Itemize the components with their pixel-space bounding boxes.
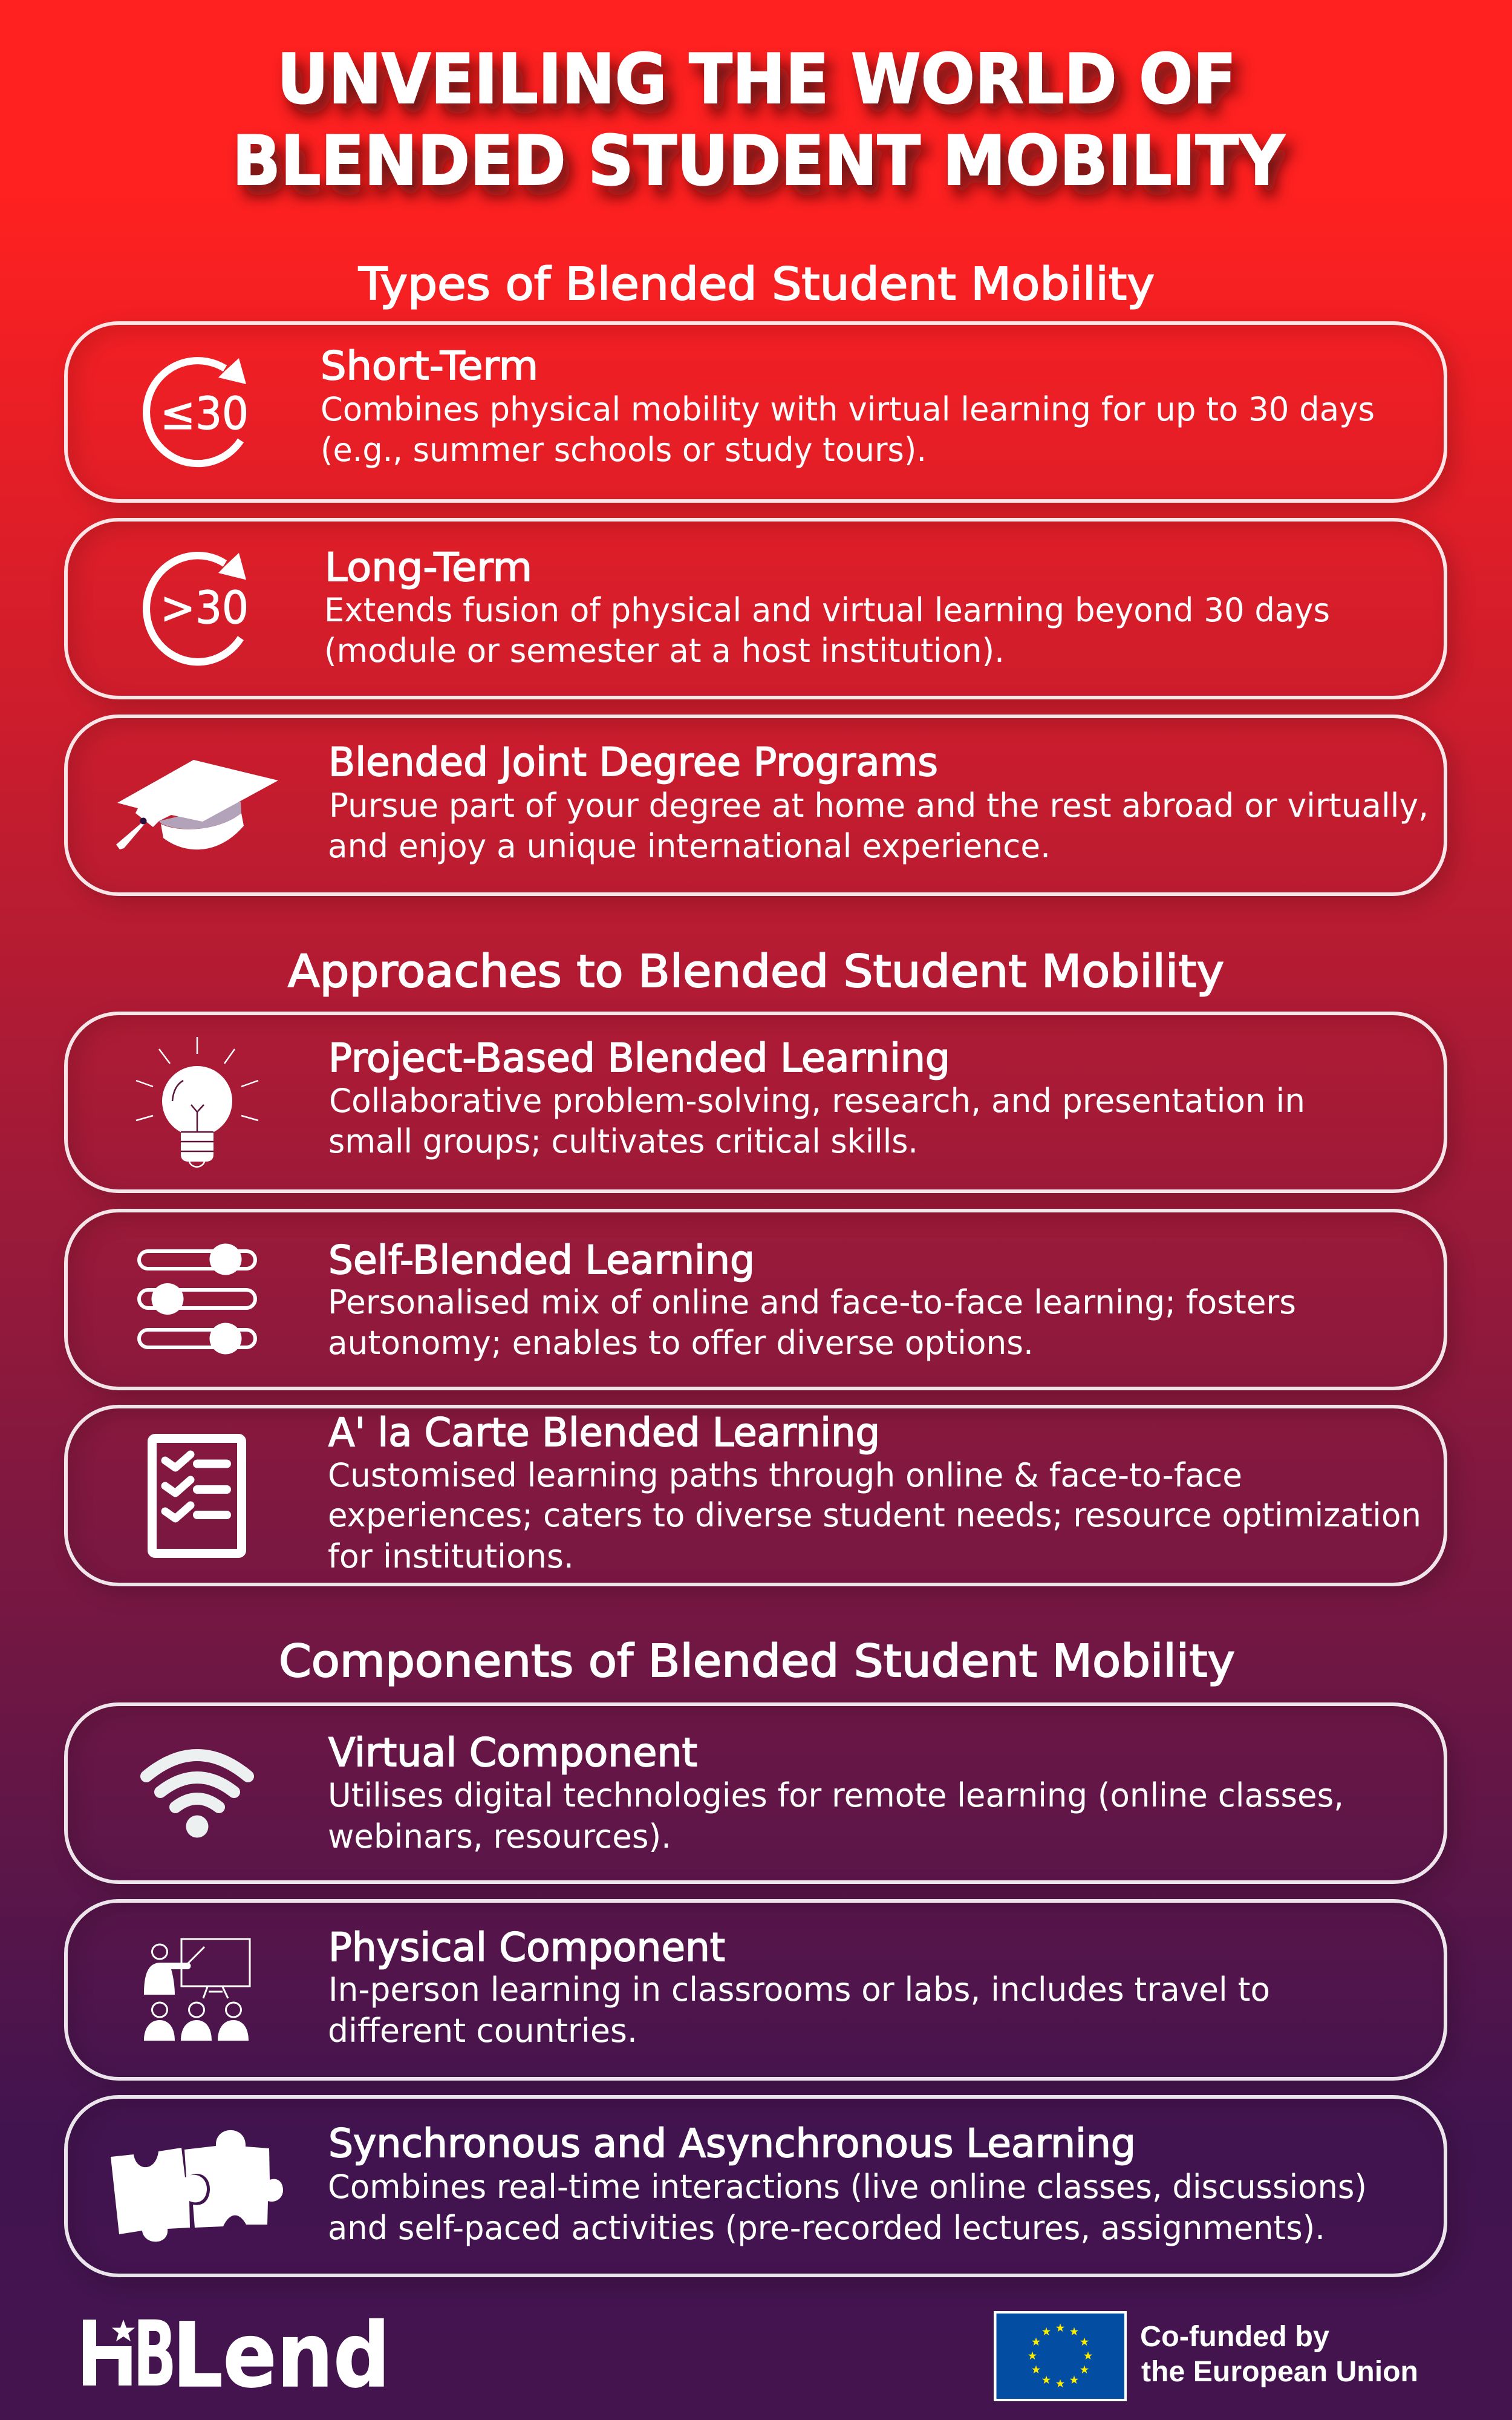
item title: Project-Based Blended Learning	[328, 1036, 950, 1081]
icon: wifi	[146, 1755, 248, 1838]
item description: and enjoy a unique international experience.	[328, 827, 1051, 865]
panel: blended joint degree	[64, 715, 1447, 896]
item description	[321, 390, 1375, 469]
item title: Synchronous and Asynchronous Learning	[328, 2121, 1136, 2167]
item description: for institutions.	[328, 1537, 574, 1575]
panel: project-based	[64, 1012, 1447, 1193]
panel: a la carte	[64, 1405, 1447, 1586]
item description: In-person learning in classrooms or labs, includes travel to	[328, 1970, 1270, 2009]
icon: classroom	[144, 1939, 250, 2041]
item description: Combines physical mobility with virtual learning for up to 30 days	[321, 390, 1375, 428]
item title: Short-Term	[321, 344, 538, 389]
co-funded text: the European Union	[1141, 2356, 1418, 2388]
item description: small groups; cultivates critical skills.	[328, 1122, 918, 1160]
panel: synchronous and asynchronous	[64, 2095, 1447, 2277]
item description: (e.g., summer schools or study tours).	[321, 431, 927, 469]
item description	[328, 1283, 1296, 1362]
item description: Collaborative problem-solving, research, and presentation in	[329, 1082, 1305, 1120]
item description	[328, 1970, 1270, 2050]
item title: Physical Component	[328, 1925, 725, 1970]
item description: webinars, resources).	[328, 1817, 671, 1856]
item title: Self-Blended Learning	[328, 1238, 755, 1283]
co-funded text: Co-funded by	[1140, 2321, 1329, 2353]
panel: self-blended	[64, 1209, 1447, 1390]
title	[232, 39, 1300, 208]
item description: Customised learning paths through online & face-to-face	[328, 1456, 1242, 1494]
icon: puzzle	[111, 2130, 283, 2242]
panel: short-term	[64, 321, 1447, 503]
item description: experiences; caters to diverse student needs; resource optimization	[328, 1496, 1421, 1534]
item description: Extends fusion of physical and virtual learning beyond 30 days	[324, 591, 1330, 629]
item description: different countries.	[328, 2012, 637, 2050]
icon: sliders	[139, 1244, 255, 1354]
item description: Personalised mix of online and face-to-face learning; fosters	[328, 1283, 1296, 1321]
item title: A' la Carte Blended Learning	[328, 1410, 880, 1456]
item description: Pursue part of your degree at home and the rest abroad or virtually,	[329, 786, 1429, 825]
item description: (module or semester at a host institution).	[324, 632, 1005, 670]
item description	[324, 591, 1330, 670]
item description	[328, 2168, 1367, 2247]
item description	[328, 1082, 1305, 1160]
item title: Virtual Component	[328, 1730, 697, 1776]
co-funded text	[1140, 2321, 1418, 2388]
item description	[328, 1776, 1344, 1856]
icon: over 30 days	[146, 553, 249, 662]
footer: EU flag and co-funded label	[994, 2311, 1418, 2401]
icon: up to 30 days: ≤30	[160, 388, 249, 440]
icon: light bulb	[136, 1037, 258, 1167]
title: UNVEILING THE WORLD OF	[277, 39, 1236, 119]
item title: Long-Term	[325, 545, 532, 590]
panel: virtual component	[64, 1702, 1447, 1884]
item description: autonomy; enables to offer diverse options.	[328, 1324, 1034, 1362]
icon: over 30 days: >30	[160, 582, 249, 634]
item description: Combines real-time interactions (live online classes, discussions)	[328, 2168, 1367, 2206]
heading: types: Types of Blended Student Mobility	[358, 258, 1155, 310]
icon: graduation cap	[116, 760, 278, 849]
item description: Utilises digital technologies for remote learning (online classes,	[328, 1776, 1344, 1814]
item description: and self-paced activities (pre-recorded lectures, assignments).	[328, 2209, 1325, 2247]
item title: Blended Joint Degree Programs	[328, 740, 938, 785]
heading: approaches: Approaches to Blended Student Mobility	[288, 946, 1224, 998]
icon: up to 30 days	[146, 358, 249, 463]
icon: checklist	[152, 1439, 242, 1554]
icon: EU flag	[994, 2311, 1127, 2401]
item description	[328, 1456, 1421, 1575]
heading: components: Components of Blended Student Mobility	[279, 1635, 1235, 1687]
panel: long-term	[64, 518, 1447, 699]
item description	[328, 786, 1429, 865]
panel: physical component	[64, 1899, 1447, 2081]
title: BLENDED STUDENT MOBILITY	[232, 121, 1285, 201]
